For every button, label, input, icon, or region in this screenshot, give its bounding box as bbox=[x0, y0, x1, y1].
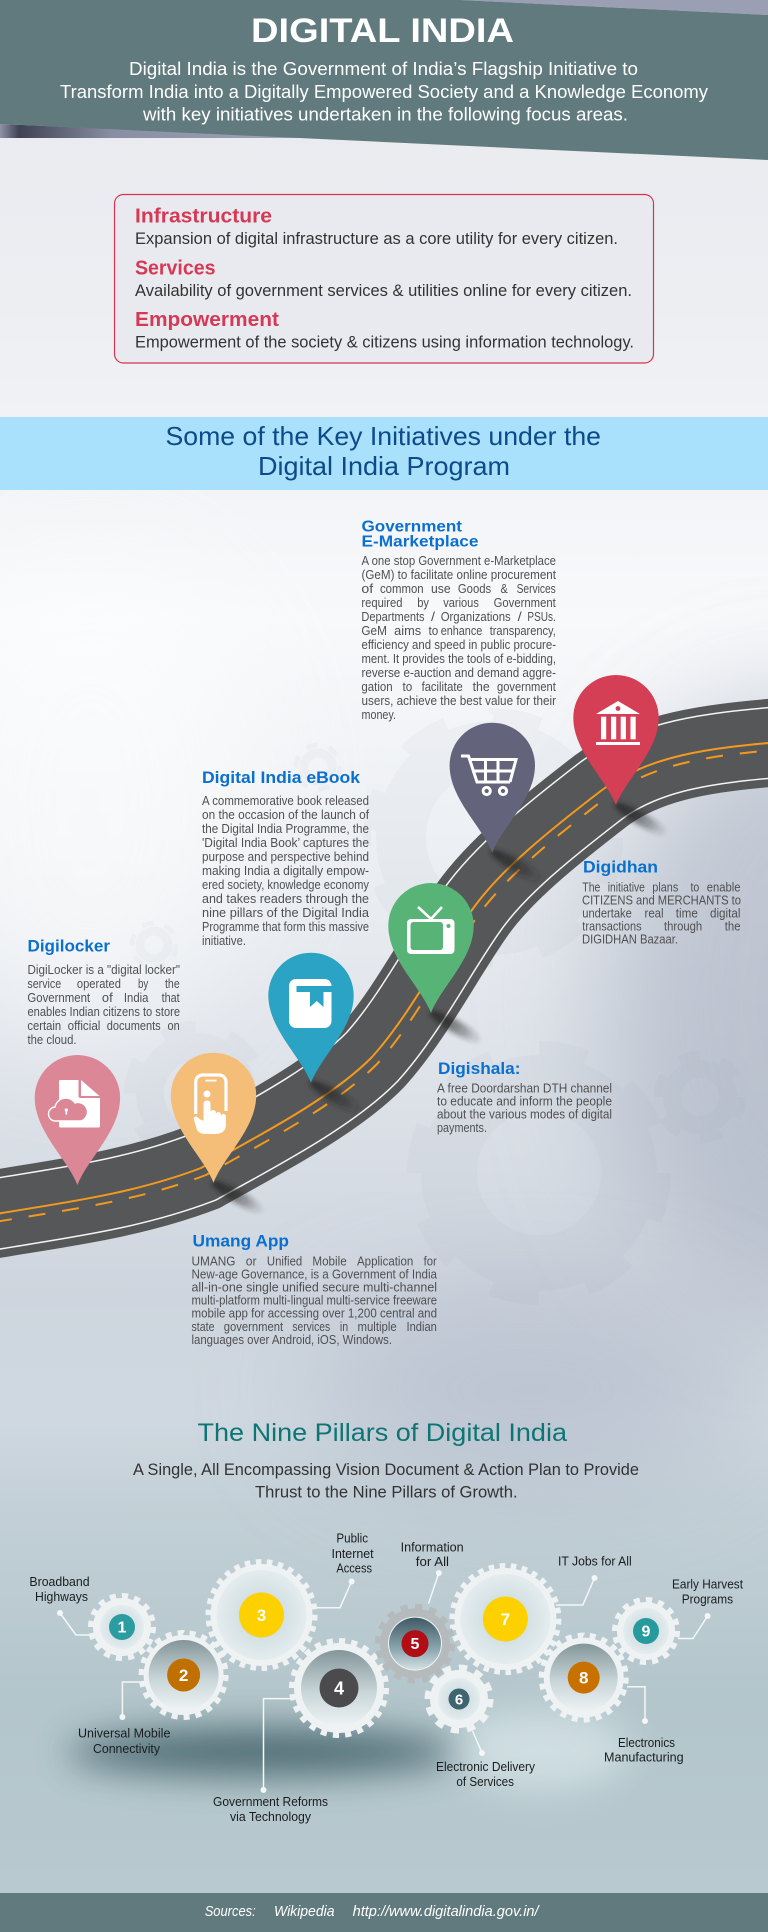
text: Digilocker bbox=[27, 938, 180, 1047]
label: Electronics Manufacturing: Manufacturing bbox=[604, 1750, 684, 1765]
paragraph: to bbox=[690, 881, 699, 895]
paragraph: 'Digital India Book’ captures the bbox=[202, 836, 369, 850]
paragraph: common bbox=[380, 582, 424, 596]
paragraph: PSUs. bbox=[527, 610, 556, 624]
paragraph: aims bbox=[394, 624, 421, 638]
paragraph: efficiency and speed in public procure- bbox=[362, 638, 556, 652]
paragraph: Organizations bbox=[441, 610, 511, 624]
subheading: A Single, All Encompassing Vision Document & Action Plan to Provide bbox=[133, 1461, 639, 1479]
label: Government Reforms via Technology bbox=[213, 1794, 328, 1824]
paragraph: documents bbox=[107, 1019, 161, 1033]
paragraph: GeM bbox=[361, 624, 387, 638]
paragraph bbox=[582, 881, 741, 947]
footer: sources bbox=[0, 1893, 768, 1932]
label: Information for All bbox=[401, 1540, 464, 1569]
footer: sources: Sources: bbox=[205, 1903, 256, 1920]
paragraph: Services bbox=[517, 582, 556, 596]
intro text: Transform India into a Digitally Empowered Society and a Knowledge Economy bbox=[60, 81, 709, 102]
paragraph bbox=[437, 1082, 612, 1135]
paragraph: Departments bbox=[361, 610, 425, 624]
label: Public Internet Access: Public bbox=[336, 1530, 368, 1546]
icon: shopping cart bbox=[461, 756, 516, 795]
text: Government E-Marketplace bbox=[361, 519, 556, 722]
paragraph: enhance bbox=[441, 624, 482, 638]
section band: key initiatives: Digital India Program bbox=[258, 451, 510, 481]
paragraph: transparency, bbox=[490, 624, 556, 638]
subheading bbox=[133, 1461, 639, 1502]
paragraph bbox=[192, 1255, 437, 1347]
paragraph: services bbox=[292, 1320, 330, 1334]
label: Electronics Manufacturing bbox=[604, 1735, 684, 1765]
subheading: Thrust to the Nine Pillars of Growth. bbox=[255, 1484, 518, 1502]
gear 5 bbox=[378, 1607, 452, 1681]
paragraph: initiative. bbox=[202, 934, 246, 948]
label: Early Harvest Programs: Early Harvest bbox=[672, 1577, 743, 1592]
paragraph: government bbox=[224, 1320, 284, 1334]
pin: Digidhan bbox=[573, 675, 659, 805]
paragraph: languages over Android, iOS, Windows. bbox=[192, 1333, 392, 1347]
label: Electronics Manufacturing: Electronics bbox=[618, 1735, 675, 1750]
paragraph: enables Indian citizens to store bbox=[28, 1005, 180, 1019]
intro text: with key initiatives undertaken in the following focus areas. bbox=[142, 104, 628, 125]
gear 4: 4 bbox=[334, 1678, 344, 1698]
paragraph: & bbox=[500, 582, 508, 596]
faint background gears bbox=[130, 716, 742, 1297]
heading: E-Marketplace bbox=[362, 534, 479, 551]
gear 8 bbox=[542, 1636, 626, 1720]
label: Broadband Highways bbox=[29, 1574, 90, 1604]
paragraph: all-in-one single unified secure multi-channel bbox=[192, 1281, 437, 1295]
paragraph: transactions bbox=[582, 920, 642, 934]
heading: Digidhan bbox=[583, 859, 658, 877]
paragraph: DigiLocker is a "digital locker" bbox=[28, 963, 180, 977]
label: Universal Mobile Connectivity: Universal Mobile bbox=[78, 1726, 170, 1741]
pin: Digital India eBook bbox=[268, 953, 354, 1083]
heading: Digital India eBook bbox=[202, 769, 361, 787]
paragraph: reverse e-auction and demand aggre- bbox=[362, 666, 556, 680]
heading: empowerment: Empowerment bbox=[135, 309, 279, 331]
label: Electronic Delivery of Services: Electronic Delivery bbox=[436, 1759, 535, 1774]
paragraph: initiative bbox=[608, 881, 645, 895]
panel: focus areas bbox=[114, 194, 654, 363]
heading: nine pillars: The Nine Pillars of Digital India bbox=[198, 1419, 567, 1447]
paragraph: Unified bbox=[267, 1255, 302, 1269]
icon: book bbox=[289, 979, 332, 1028]
paragraph: A commemorative book released bbox=[202, 794, 369, 808]
label: Universal Mobile Connectivity bbox=[78, 1726, 170, 1756]
gear 7 bbox=[452, 1566, 558, 1672]
gear 5: 5 bbox=[411, 1636, 420, 1653]
road bbox=[0, 742, 768, 1222]
paragraph: UMANG bbox=[192, 1255, 236, 1269]
label: Early Harvest Programs: Programs bbox=[682, 1592, 733, 1607]
label: Early Harvest Programs bbox=[672, 1577, 743, 1607]
gear 7: 7 bbox=[501, 1610, 510, 1629]
paragraph: ment. It provides the tools of e-bidding, bbox=[362, 652, 556, 666]
label: Electronic Delivery of Services: of Services bbox=[456, 1774, 514, 1789]
text: Digital India eBook bbox=[202, 769, 370, 948]
heading: Digishala: bbox=[438, 1060, 520, 1078]
paragraph: time bbox=[676, 907, 698, 921]
paragraph: DIGIDHAN Bazaar. bbox=[582, 933, 678, 947]
paragraph: the bbox=[473, 680, 490, 694]
paragraph: through bbox=[664, 920, 702, 934]
paragraph: Government bbox=[494, 596, 556, 610]
label: Public Internet Access: Access bbox=[336, 1560, 372, 1575]
icon: bank bbox=[596, 701, 640, 745]
gear 8: 8 bbox=[579, 1669, 588, 1688]
paragraph: that bbox=[162, 991, 180, 1005]
footer: sources: Wikipedia bbox=[274, 1903, 334, 1920]
label: IT Jobs for All: IT Jobs for All bbox=[558, 1554, 632, 1569]
paragraph: The bbox=[582, 881, 600, 895]
paragraph: multi-platform multi-lingual multi-service freeware bbox=[192, 1294, 437, 1308]
gear 4 bbox=[292, 1641, 386, 1735]
paragraph: ered society, knowledge economy bbox=[202, 878, 370, 892]
paragraph: Application bbox=[357, 1255, 413, 1269]
text: Digidhan bbox=[582, 859, 741, 947]
paragraph: facilitate bbox=[422, 680, 463, 694]
paragraph: Indian bbox=[406, 1320, 437, 1334]
icon: phone with hand bbox=[194, 1075, 226, 1134]
paragraph: to educate and inform the people bbox=[437, 1095, 612, 1109]
gear 9: 9 bbox=[642, 1624, 651, 1640]
gear 3 bbox=[208, 1562, 314, 1668]
text: empowerment: Empowerment of the society & citizens using information technology. bbox=[135, 334, 634, 352]
paragraph: official bbox=[68, 1019, 100, 1033]
paragraph: the Digital India Programme, the bbox=[202, 822, 369, 836]
paragraph: multiple bbox=[358, 1320, 397, 1334]
paragraph: A one stop Government e-Marketplace bbox=[362, 554, 556, 568]
paragraph: on bbox=[168, 1019, 180, 1033]
paragraph: money. bbox=[362, 708, 396, 722]
pillar labels bbox=[29, 1530, 743, 1824]
paragraph: required bbox=[361, 596, 402, 610]
connector lines bbox=[57, 1570, 711, 1793]
gear 6: 6 bbox=[455, 1692, 463, 1708]
paragraph: / bbox=[431, 610, 436, 624]
paragraph: undertake bbox=[582, 907, 632, 921]
label: Government Reforms via Technology: via Technology bbox=[230, 1809, 311, 1824]
paragraph: the bbox=[165, 977, 180, 991]
paragraph: digital bbox=[710, 907, 740, 921]
paragraph: certain bbox=[27, 1019, 61, 1033]
intro text: Digital India is the Government of India’s Flagship Initiative to bbox=[129, 58, 638, 79]
paragraph: plans bbox=[652, 881, 678, 895]
paragraph: gation bbox=[361, 680, 393, 694]
paragraph: use bbox=[431, 582, 451, 596]
label: Information for All: Information bbox=[401, 1540, 464, 1555]
label: Information for All: for All bbox=[416, 1554, 449, 1569]
paragraph: making India a digitally empow- bbox=[202, 864, 369, 878]
label: Broadband Highways: Highways bbox=[35, 1589, 88, 1604]
text: Digishala bbox=[437, 1060, 612, 1135]
heading: Umang App bbox=[192, 1233, 289, 1251]
heading: Digilocker bbox=[28, 938, 111, 956]
heading: nine pillars bbox=[133, 1419, 639, 1502]
paragraph: for bbox=[424, 1255, 437, 1269]
paragraph: / bbox=[518, 610, 522, 624]
header banner bbox=[0, 0, 768, 160]
footer: sources: http://www.digitalindia.gov.in/ bbox=[353, 1903, 540, 1920]
paragraph: Programme that form this massive bbox=[202, 920, 369, 934]
paragraph: (GeM) to facilitate online procurement bbox=[362, 568, 556, 582]
paragraph: or bbox=[246, 1255, 257, 1269]
paragraph: of bbox=[102, 991, 113, 1005]
label: Government Reforms via Technology: Government Reforms bbox=[213, 1794, 328, 1809]
text: services: Availability of government services & utilities online for every citizen. bbox=[135, 282, 632, 300]
gear 3: 3 bbox=[257, 1606, 266, 1625]
pin: Digilocker bbox=[35, 1055, 120, 1185]
paragraph: of bbox=[361, 582, 374, 596]
paragraph: purpose and perspective behind bbox=[202, 850, 369, 864]
paragraph: mobile app for accessing over 1,200 central and bbox=[192, 1307, 437, 1321]
label: Universal Mobile Connectivity: Connectivity bbox=[93, 1741, 160, 1756]
paragraph: India bbox=[124, 991, 148, 1005]
title: DIGITAL INDIA bbox=[251, 12, 514, 50]
gear 1 bbox=[91, 1596, 153, 1658]
paragraph: the cloud. bbox=[28, 1033, 76, 1047]
paragraph: payments. bbox=[437, 1121, 487, 1135]
section band: key initiatives: Some of the Key Initiatives under the bbox=[166, 421, 601, 451]
gear 1: 1 bbox=[118, 1620, 127, 1636]
heading: Government bbox=[362, 519, 462, 536]
intro text bbox=[60, 58, 709, 125]
label: Electronic Delivery of Services bbox=[436, 1759, 535, 1789]
label: Broadband Highways: Broadband bbox=[29, 1574, 90, 1589]
gear 9 bbox=[615, 1600, 677, 1662]
paragraph: users, achieve the best value for their bbox=[362, 694, 556, 708]
icon: television bbox=[407, 907, 454, 954]
paragraph: state bbox=[192, 1320, 214, 1334]
paragraph: on the occasion of the launch of bbox=[202, 808, 369, 822]
pin shadows bbox=[209, 798, 670, 1218]
paragraph: enable bbox=[707, 881, 740, 895]
label: Public Internet Access: Internet bbox=[332, 1546, 374, 1561]
icon: document with cloud bbox=[48, 1080, 100, 1128]
gear 2 bbox=[142, 1633, 226, 1717]
paragraph: nine pillars of the Digital India bbox=[202, 906, 369, 920]
pin: Digishala bbox=[388, 883, 474, 1013]
paragraph: CITIZENS and MERCHANTS to bbox=[582, 894, 741, 908]
paragraph: Mobile bbox=[312, 1255, 347, 1269]
paragraph: in bbox=[340, 1320, 348, 1334]
paragraph: New-age Governance, is a Government of India bbox=[192, 1268, 437, 1282]
pin: Umang App bbox=[171, 1053, 256, 1183]
paragraph: Goods bbox=[458, 582, 491, 596]
paragraph: government bbox=[497, 680, 556, 694]
gear 6 bbox=[428, 1668, 490, 1730]
paragraph: service bbox=[27, 977, 61, 991]
paragraph: various bbox=[443, 596, 479, 610]
gear shadow bbox=[67, 1710, 630, 1790]
paragraph: to bbox=[428, 624, 438, 638]
heading: infrastructure: Infrastructure bbox=[135, 206, 272, 228]
paragraph: A free Doordarshan DTH channel bbox=[437, 1082, 612, 1096]
section band: key initiatives bbox=[0, 417, 768, 490]
paragraph: operated bbox=[77, 977, 121, 991]
paragraph bbox=[27, 963, 180, 1047]
paragraph bbox=[361, 554, 556, 722]
paragraph bbox=[202, 794, 370, 948]
pin: Government E-Marketplace bbox=[450, 723, 535, 853]
heading: services: Services bbox=[135, 257, 216, 279]
paragraph: and takes readers through the bbox=[202, 892, 369, 906]
paragraph: Government bbox=[27, 991, 91, 1005]
paragraph: about the various modes of digital bbox=[437, 1108, 612, 1122]
label: Public Internet Access bbox=[332, 1530, 374, 1575]
paragraph: to bbox=[402, 680, 412, 694]
paragraph: by bbox=[417, 596, 430, 610]
paragraph: the bbox=[725, 920, 740, 934]
paragraph: real bbox=[644, 907, 664, 921]
text: infrastructure: Expansion of digital infrastructure as a core utility for every citizen. bbox=[135, 230, 618, 248]
heading bbox=[362, 519, 479, 551]
paragraph: by bbox=[138, 977, 149, 991]
text: Umang App bbox=[192, 1233, 437, 1347]
gear 2: 2 bbox=[179, 1666, 188, 1685]
